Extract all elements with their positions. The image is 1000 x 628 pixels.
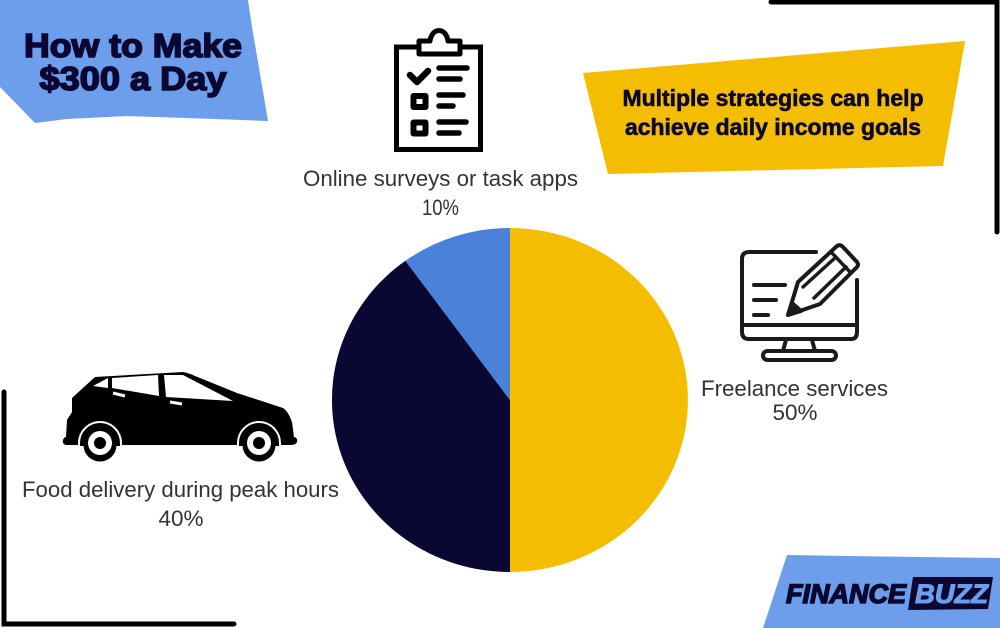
label: freelance services (701, 376, 888, 425)
logo: FinanceBuzz: BUZZ (915, 579, 990, 609)
icon: clipboard checklist (396, 30, 480, 150)
label: food delivery: Food delivery during peak hours (22, 477, 339, 502)
slice: online surveys 10% (405, 228, 510, 400)
title panel (0, 0, 268, 123)
frame: top right corner (771, 2, 997, 232)
icon: car (63, 372, 297, 462)
callout: key takeaway: achieve daily income goals (625, 114, 921, 140)
label: freelance services: 50% (772, 400, 818, 425)
icon: computer with pencil (742, 245, 858, 360)
callout: key takeaway (583, 41, 965, 174)
slice: freelance services 50% (510, 228, 688, 572)
label: food delivery: 40% (158, 506, 204, 531)
slice: food delivery 40% (332, 261, 510, 572)
frame: bottom left corner (4, 392, 234, 624)
label: online surveys (303, 166, 578, 220)
label: freelance services: Freelance services (701, 376, 888, 401)
logo: FinanceBuzz (786, 577, 993, 610)
logo panel (763, 555, 1000, 628)
pie chart (332, 228, 688, 572)
callout: key takeaway: Multiple strategies can help (622, 85, 924, 111)
label: food delivery (22, 477, 339, 531)
title (24, 27, 242, 97)
label: online surveys: 10% (422, 195, 459, 220)
label: online surveys: Online surveys or task apps (303, 166, 578, 191)
title: $300 a Day (40, 60, 227, 97)
logo: FinanceBuzz: FINANCE (786, 579, 907, 609)
title: How to Make (24, 27, 242, 64)
